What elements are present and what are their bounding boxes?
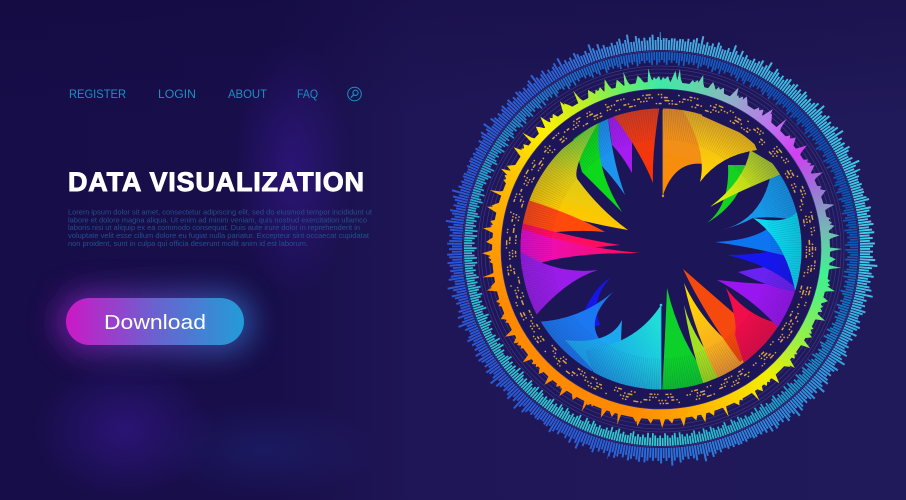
fans: upper right bbox=[663, 106, 787, 223]
circular data visualization bbox=[446, 32, 878, 466]
apex markers bbox=[660, 110, 664, 390]
outer frequency bars bbox=[446, 32, 878, 466]
nav link: login: LOGIN bbox=[158, 89, 196, 101]
dark band with gold data dots bbox=[501, 89, 821, 409]
rainbow spiked waveform band bbox=[482, 68, 842, 428]
concentric thin rings bbox=[463, 51, 859, 447]
fans: lower left bbox=[536, 278, 661, 394]
title: DATA VISUALIZATION bbox=[68, 167, 364, 197]
body text: voluptate velit esse cillum dolore eu fugiat nulla pariatur. Excepteur sint occaecat cupidatat bbox=[68, 231, 369, 240]
download button bbox=[56, 290, 254, 354]
body text: Lorem ipsum dolor sit amet, consectetur adipiscing elit, sed do eiusmod tempor incididunt ut bbox=[68, 208, 372, 216]
body text bbox=[68, 208, 372, 248]
chord line texture bbox=[520, 108, 802, 390]
icon: search bbox=[348, 87, 361, 101]
body text: labore et dolore magna aliqua. Ut enim ad minim veniam, quis nostrud exercitation ullamco bbox=[68, 215, 367, 224]
fans: bottom bbox=[662, 269, 787, 394]
fans: upper left bbox=[518, 104, 660, 238]
download button: Download bbox=[104, 312, 206, 334]
fans: left bbox=[518, 222, 640, 320]
body text: non proident, sunt in culpa qui officia deserunt mollit anim id est laborum. bbox=[68, 239, 308, 248]
nav link: faq: FAQ bbox=[297, 89, 318, 101]
nav link: about: ABOUT bbox=[228, 89, 267, 101]
nav link: register: REGISTER bbox=[69, 89, 126, 101]
navigation menu bbox=[69, 87, 361, 101]
fans: right bbox=[716, 175, 802, 328]
body text: laboris nisi ut aliquip ex ea commodo consequat. Duis aute irure dolor in reprehenderit in bbox=[68, 223, 360, 232]
inner frequency bars bbox=[464, 52, 858, 446]
rainbow chord fans disc bbox=[518, 104, 808, 394]
